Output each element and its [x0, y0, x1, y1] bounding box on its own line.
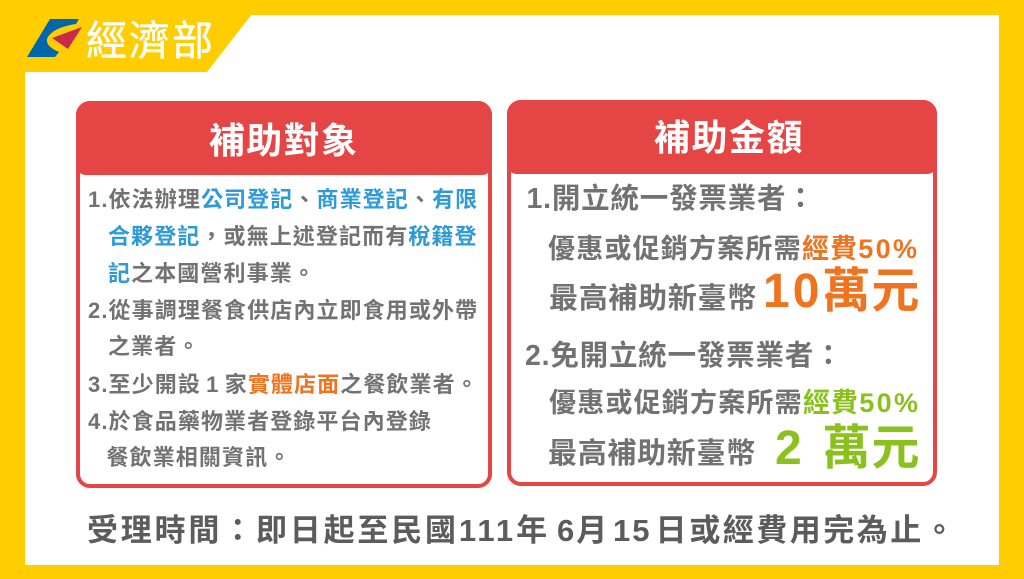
text block: eligibility list: 合夥登記，或無上述登記而有稅籍登	[108, 224, 478, 249]
text block: invoice-issuing businesses: 最高補助新臺幣	[549, 283, 757, 315]
text block: non-invoice businesses: 2.免開立統一發票業者：	[525, 340, 843, 372]
panel header band	[507, 100, 937, 174]
amount: 2萬元: 2 萬元	[775, 422, 921, 475]
panel frame	[76, 101, 492, 488]
text block: eligibility list	[88, 187, 479, 470]
title: ministry name: 經濟部	[86, 18, 215, 64]
text block: eligibility list: 記之本國營利事業。	[108, 261, 316, 286]
heading: 補助金額	[654, 117, 804, 158]
text block: eligibility list: 3.至少開設 1 家實體店面之餐飲業者。	[88, 372, 479, 397]
text block: non-invoice businesses: 優惠或促銷方案所需經費50%	[549, 388, 920, 418]
text block: eligibility list: 之業者。	[108, 334, 200, 359]
panel header band	[76, 101, 492, 175]
footer: application period: 受理時間：即日起至民國111年6月15日或經費用完為止。	[87, 513, 957, 548]
yellow header tab	[25, 15, 252, 72]
panel frame	[507, 100, 937, 486]
panel: subsidy recipients	[76, 101, 492, 488]
text block: non-invoice businesses: 最高補助新臺幣	[548, 438, 756, 470]
text block: eligibility list: 2.從事調理餐食供店內立即食用或外帶	[88, 298, 478, 323]
text block: invoice-issuing businesses: 1.開立統一發票業者：	[526, 183, 816, 215]
panel: subsidy amount	[507, 100, 937, 486]
text block: eligibility list: 餐飲業相關資訊。	[106, 445, 291, 470]
text block: invoice-issuing businesses: 優惠或促銷方案所需經費50%	[548, 234, 919, 264]
text block: eligibility list: 4.於食品藥物業者登錄平台內登錄	[88, 409, 432, 434]
text block: invoice-issuing businesses	[526, 183, 920, 318]
text block: eligibility list: 1.依法辦理公司登記、商業登記、有限	[88, 187, 478, 212]
text block: non-invoice businesses	[525, 340, 921, 475]
icon: ministry logo	[27, 19, 82, 57]
heading: 補助對象	[209, 120, 358, 161]
amount: 10萬元: 10萬元	[763, 265, 920, 318]
